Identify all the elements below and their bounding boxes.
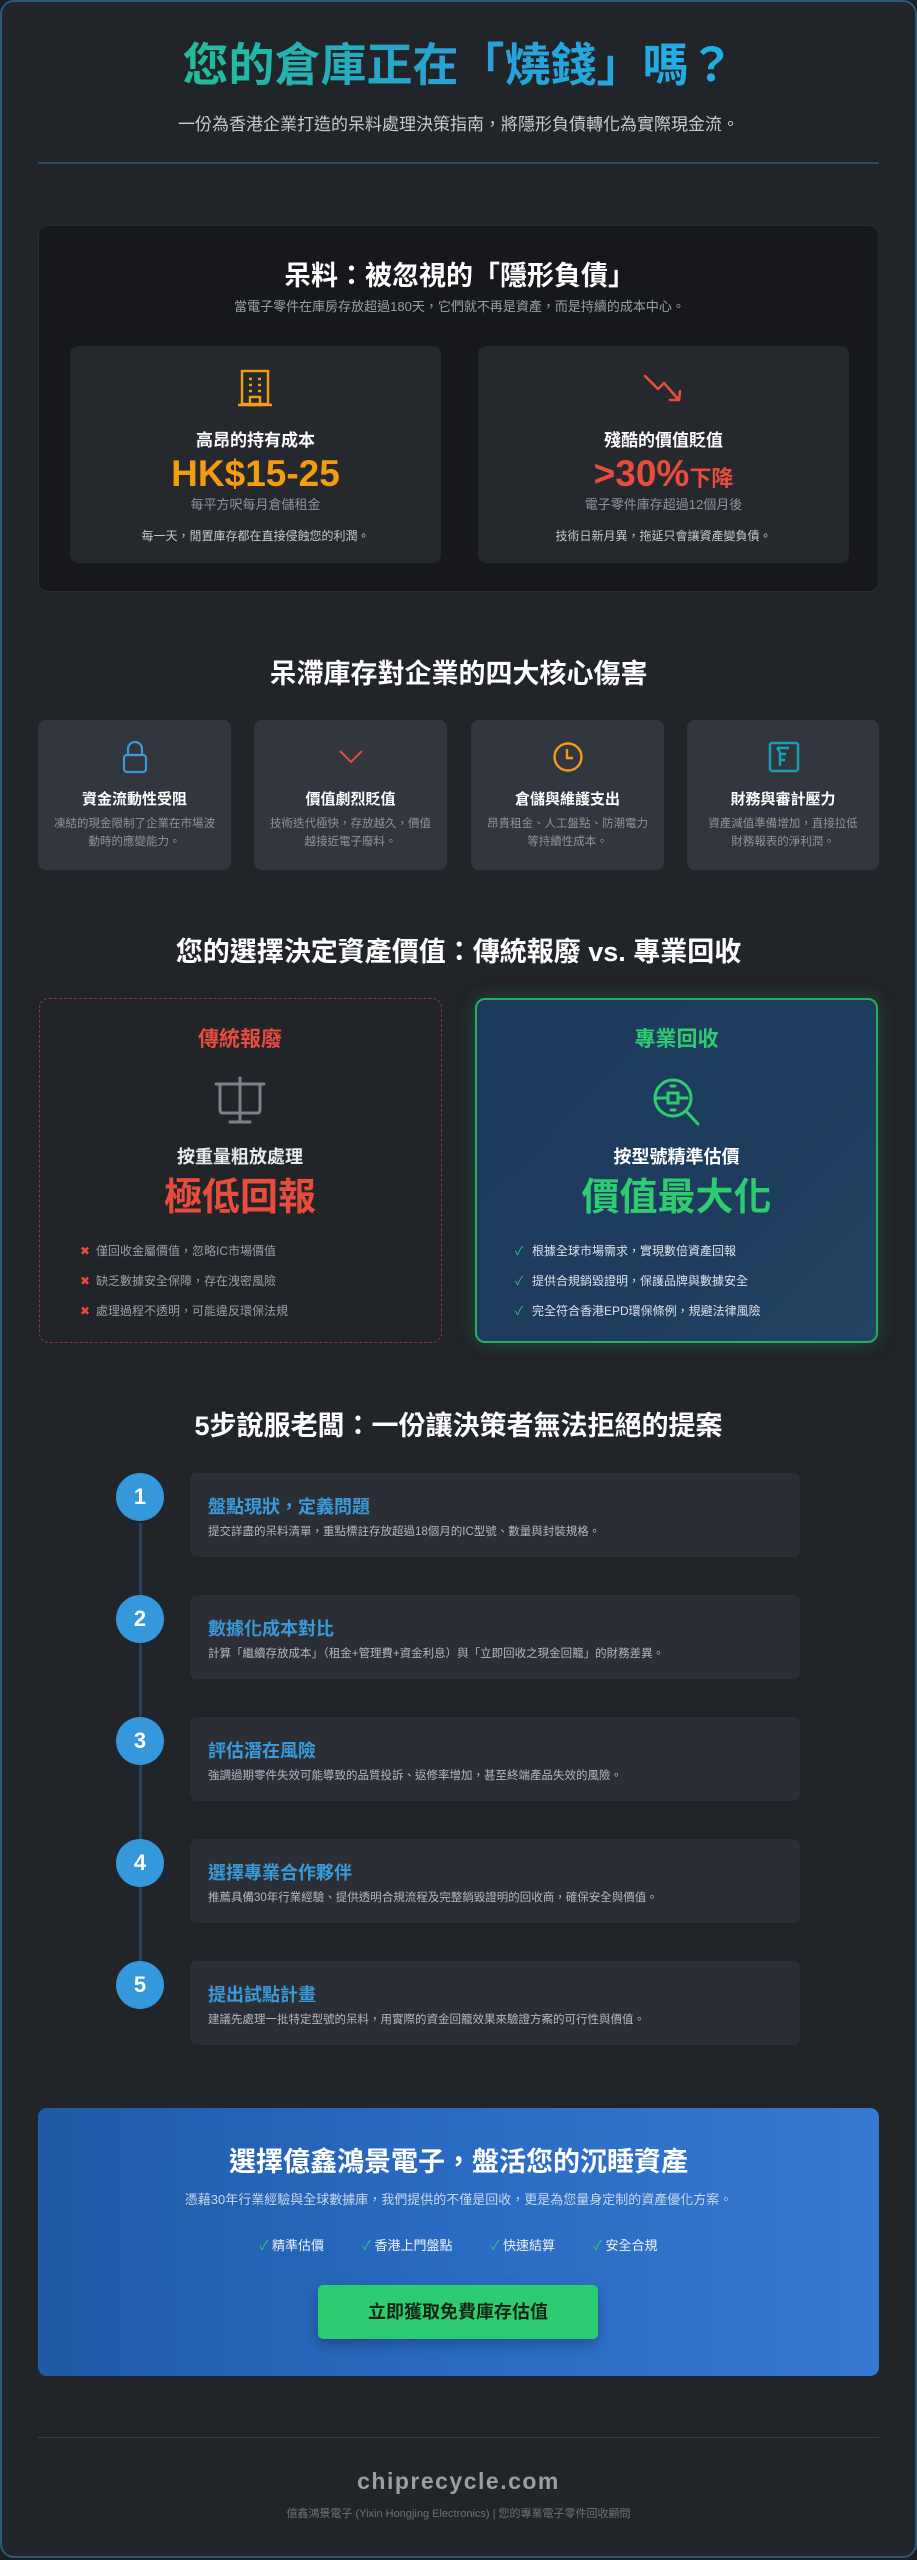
heading: four harms: 呆滯庫存對企業的四大核心傷害 <box>270 659 648 689</box>
step card: 提出試點計畫 <box>208 1985 316 2005</box>
step card: 數據化成本對比 <box>208 1619 334 1639</box>
heading: comparison: 您的選擇決定資產價值：傳統報廢 vs. 專業回收 <box>176 937 741 967</box>
list: pros: 提供合規銷毀證明，保護品牌與數據安全 <box>532 1274 748 1288</box>
value caption: 每平方呎每月倉儲租金 <box>190 497 320 512</box>
heading: 5 steps: 5步說服老闆：一份讓決策者無法拒絕的提案 <box>194 1411 722 1441</box>
list: cons: ✖ <box>80 1304 90 1318</box>
list: cons: ✖ <box>80 1274 90 1288</box>
step card: 建議先處理一批特定型號的呆料，用實際的資金回籠效果來驗證方案的可行性與價值。 <box>208 2014 645 2026</box>
step card: 評估潛在風險 <box>208 1741 316 1761</box>
step card: 選擇專業合作夥伴 <box>208 1863 352 1883</box>
result: 價值最大化 <box>581 1177 772 1219</box>
subtitle: 一份為香港企業打造的呆料處理決策指南，將隱形負債轉化為實際現金流。 <box>178 115 739 134</box>
title: 您的倉庫正在「燒錢」嗎？ <box>182 39 734 91</box>
icon: receipt <box>768 742 800 772</box>
icon: building <box>238 370 272 406</box>
list: cons: 缺乏數據安全保障，存在洩密風險 <box>96 1274 276 1288</box>
card description: 每一天，閒置庫存都在直接侵蝕您的利潤。 <box>141 529 370 543</box>
card: holding cost <box>70 346 441 563</box>
step card: 盤點現狀，定義問題 <box>208 1497 370 1517</box>
button: 立即獲取免費庫存估值 <box>368 2302 548 2322</box>
icon: trend down <box>644 374 682 402</box>
step card <box>190 1473 800 1557</box>
footer: domain: chiprecycle.com <box>357 2468 560 2494</box>
card description: 技術日新月異，拖延只會讓資產變負債。 <box>555 529 772 543</box>
panel title: 傳統報廢 <box>198 1028 282 1051</box>
method: 按型號精準估價 <box>614 1147 740 1167</box>
step card: 提交詳盡的呆料清單，重點標註存放超過18個月的IC型號、數量與封裝規格。 <box>208 1526 600 1538</box>
button <box>318 2285 598 2339</box>
list: pros: ✓ <box>515 1274 523 1288</box>
list: pros: 根據全球市場需求，實現數倍資產回報 <box>532 1244 736 1258</box>
card: finance <box>687 720 879 870</box>
list: pros: ✓ <box>515 1244 523 1258</box>
step card <box>190 1717 800 1801</box>
card title: 資金流動性受阻 <box>82 791 187 808</box>
footer: company: 億鑫鴻景電子 (Yixin Hongjing Electronics) | 您的專業電子零件回收顧問 <box>286 2508 631 2520</box>
step 3 <box>116 1717 800 1801</box>
step 1 <box>116 1473 800 1557</box>
step number: 5 <box>134 1972 146 1997</box>
card title: 倉儲與維護支出 <box>515 791 620 808</box>
value caption: 電子零件庫存超過12個月後 <box>585 497 742 512</box>
CTA title: 選擇億鑫鴻景電子，盤活您的沉睡資產 <box>229 2147 688 2177</box>
step card <box>190 1839 800 1923</box>
step 5 <box>116 1961 800 2045</box>
list: cons: ✖ <box>80 1244 90 1258</box>
step 2 <box>116 1595 800 1679</box>
card description: 技術迭代極快，存放越久，價值越接近電子廢料。 <box>270 818 431 848</box>
step number: 4 <box>134 1850 146 1875</box>
card title: 財務與審計壓力 <box>730 791 836 808</box>
panel: traditional scrapping <box>39 998 442 1343</box>
step card <box>190 1961 800 2045</box>
step number <box>116 1961 164 2009</box>
step card: 推薦具備30年行業經驗、提供透明合規流程及完整銷毀證明的回收商，確保安全與價值。 <box>208 1892 658 1904</box>
panel: four harms cards <box>38 720 879 870</box>
icon: chevron down <box>339 750 363 764</box>
step number: 2 <box>134 1606 146 1631</box>
feature checks: ✓ 精準估價 ✓ 香港上門盤點 ✓ 快速結算 ✓ 安全合規 <box>259 2238 658 2253</box>
icon: magnifier chip <box>654 1078 700 1126</box>
timeline: 5 steps <box>116 1473 800 2045</box>
value: >30%下降 <box>594 453 733 494</box>
icon: lock <box>122 740 148 774</box>
icon: scale <box>214 1076 266 1124</box>
result: 極低回報 <box>164 1177 316 1219</box>
step card: 計算「繼續存放成本」（租金+管理費+資金利息）與「立即回收之現金回籠」的財務差異。 <box>208 1648 664 1660</box>
card: liquidity <box>38 720 231 870</box>
heading: 呆料：被忽視的「隱形負債」 <box>284 261 635 291</box>
step number <box>116 1595 164 1643</box>
step number <box>116 1473 164 1521</box>
list: cons: 處理過程不透明，可能違反環保法規 <box>96 1304 288 1318</box>
panel: professional recycling <box>475 998 878 1343</box>
card: depreciation <box>254 720 447 870</box>
list: cons <box>80 1244 288 1318</box>
panel title: 專業回收 <box>634 1028 718 1051</box>
card description: 資產減值準備增加，直接拉低財務報表的淨利潤。 <box>708 818 858 848</box>
card description: 凍結的現金限制了企業在市場波動時的應變能力。 <box>54 818 215 848</box>
step number <box>116 1839 164 1887</box>
card: storage <box>471 720 664 870</box>
step number: 1 <box>134 1484 146 1509</box>
panel: hidden liability <box>38 225 879 592</box>
card title: 殘酷的價值貶值 <box>604 431 723 450</box>
step number: 3 <box>134 1728 146 1753</box>
panel subtitle: 當電子零件在庫房存放超過180天，它們就不再是資產，而是持續的成本中心。 <box>234 299 685 314</box>
list: pros: 完全符合香港EPD環保條例，規避法律風險 <box>532 1304 761 1318</box>
list: cons: 僅回收金屬價值，忽略IC市場價值 <box>96 1244 276 1258</box>
step 4 <box>116 1839 800 1923</box>
card title: 價值劇烈貶值 <box>305 791 396 808</box>
list: pros: ✓ <box>515 1304 523 1318</box>
card title: 高昂的持有成本 <box>196 431 315 450</box>
card description: 昂貴租金、人工盤點、防潮電力等持續性成本。 <box>487 818 648 848</box>
step card <box>190 1595 800 1679</box>
CTA text: 憑藉30年行業經驗與全球數據庫，我們提供的不僅是回收，更是為您量身定制的資產優化方案。 <box>185 2192 732 2207</box>
card: depreciation <box>478 346 849 563</box>
panel: call to action <box>38 2108 879 2376</box>
icon: clock <box>553 742 583 772</box>
step number <box>116 1717 164 1765</box>
step card: 強調過期零件失效可能導致的品質投訴、返修率增加，甚至終端產品失效的風險。 <box>208 1770 622 1782</box>
value: HK$15-25 <box>171 453 340 494</box>
list: pros <box>515 1244 761 1318</box>
method: 按重量粗放處理 <box>177 1147 303 1167</box>
